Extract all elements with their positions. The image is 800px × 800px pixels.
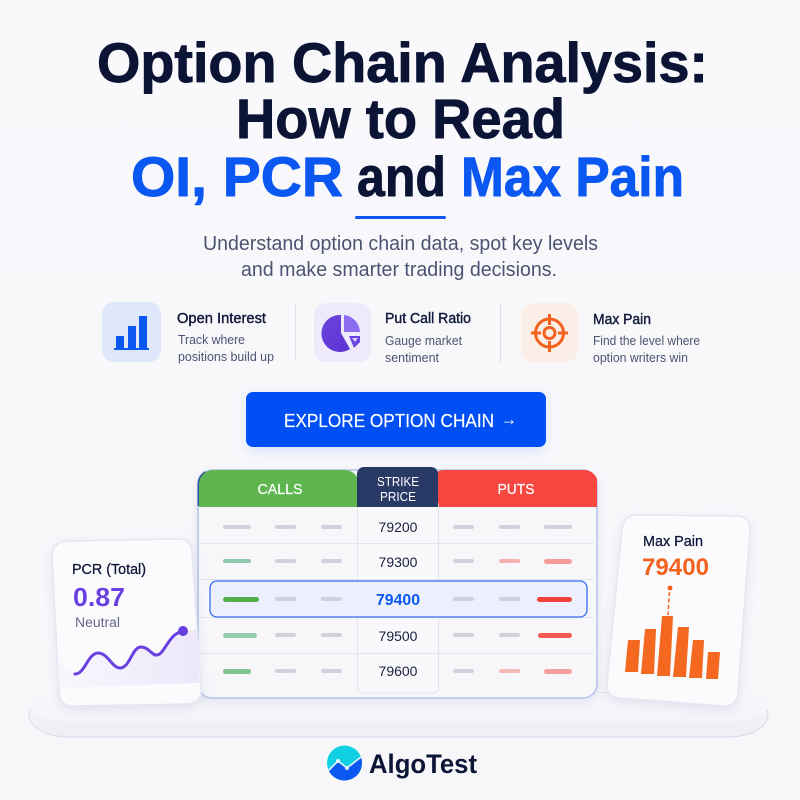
card: PCR (52, 539, 201, 706)
call bars (223, 525, 342, 674)
strike column: PRICE (380, 490, 416, 504)
title (97, 31, 708, 208)
feature text: put call ratio (385, 333, 462, 365)
feature text: open interest: positions build up (178, 349, 274, 364)
feature text: put call ratio: sentiment (385, 350, 439, 365)
calls header (199, 470, 357, 507)
sparkline (57, 626, 199, 688)
subtitle: Understand option chain data, spot key levels (203, 233, 598, 255)
feature heading: put call ratio: Put Call Ratio (385, 311, 471, 327)
feature heading: max pain: Max Pain (593, 312, 651, 328)
puts header: PUTS (498, 481, 534, 498)
feature text: open interest: Track where (178, 332, 245, 347)
strike prices: 79300 (379, 554, 418, 570)
subtitle (203, 233, 598, 281)
strike column: STRIKE (377, 475, 419, 489)
strike prices: 79200 (379, 519, 418, 535)
highlighted row (210, 581, 587, 617)
logo mark (327, 746, 362, 782)
max pain bars (625, 616, 720, 679)
strike column (357, 467, 438, 693)
title: and (357, 145, 446, 208)
button: explore option chain (246, 392, 546, 447)
feature text: max pain (593, 333, 700, 365)
platform (29, 693, 768, 737)
pointer (668, 586, 672, 615)
feature: put call ratio (314, 303, 471, 365)
strike prices: 79600 (379, 663, 418, 679)
calls header: CALLS (258, 481, 302, 498)
strike prices: 79400 (376, 592, 420, 609)
feature text: max pain: Find the level where (593, 333, 700, 348)
title: OI, PCR (131, 145, 343, 208)
icon: pie chart (314, 303, 371, 362)
button: explore option chain: EXPLORE OPTION CHAIN (284, 410, 494, 431)
max pain value: 79400 (642, 554, 709, 581)
button: explore option chain: → (501, 409, 517, 429)
title underline (355, 216, 446, 219)
icon: bar chart (102, 302, 161, 362)
subtitle: and make smarter trading decisions. (241, 259, 557, 281)
PCR status: Neutral (75, 615, 120, 630)
icon: target (521, 303, 578, 362)
logo: AlgoTest (327, 746, 477, 782)
put bars (453, 525, 572, 674)
max pain label: Max Pain (643, 534, 703, 550)
feature text: max pain: option writers win (593, 350, 688, 365)
strike prices: 79500 (379, 628, 418, 644)
title: Max Pain (461, 145, 684, 208)
feature: max pain (521, 303, 700, 365)
logo wordmark: AlgoTest (369, 749, 477, 779)
puts header (438, 470, 597, 507)
feature: open interest (102, 302, 274, 364)
feature text: put call ratio: Gauge market (385, 333, 462, 348)
PCR value: 0.87 (73, 582, 125, 612)
title: Option Chain Analysis: (97, 31, 708, 94)
option chain table (198, 467, 598, 698)
strike prices (376, 519, 420, 679)
card: max pain (607, 515, 750, 706)
PCR label: PCR (Total) (72, 562, 146, 578)
feature text: open interest (178, 332, 274, 364)
title: How to Read (236, 87, 565, 150)
feature heading: open interest: Open Interest (177, 311, 266, 327)
